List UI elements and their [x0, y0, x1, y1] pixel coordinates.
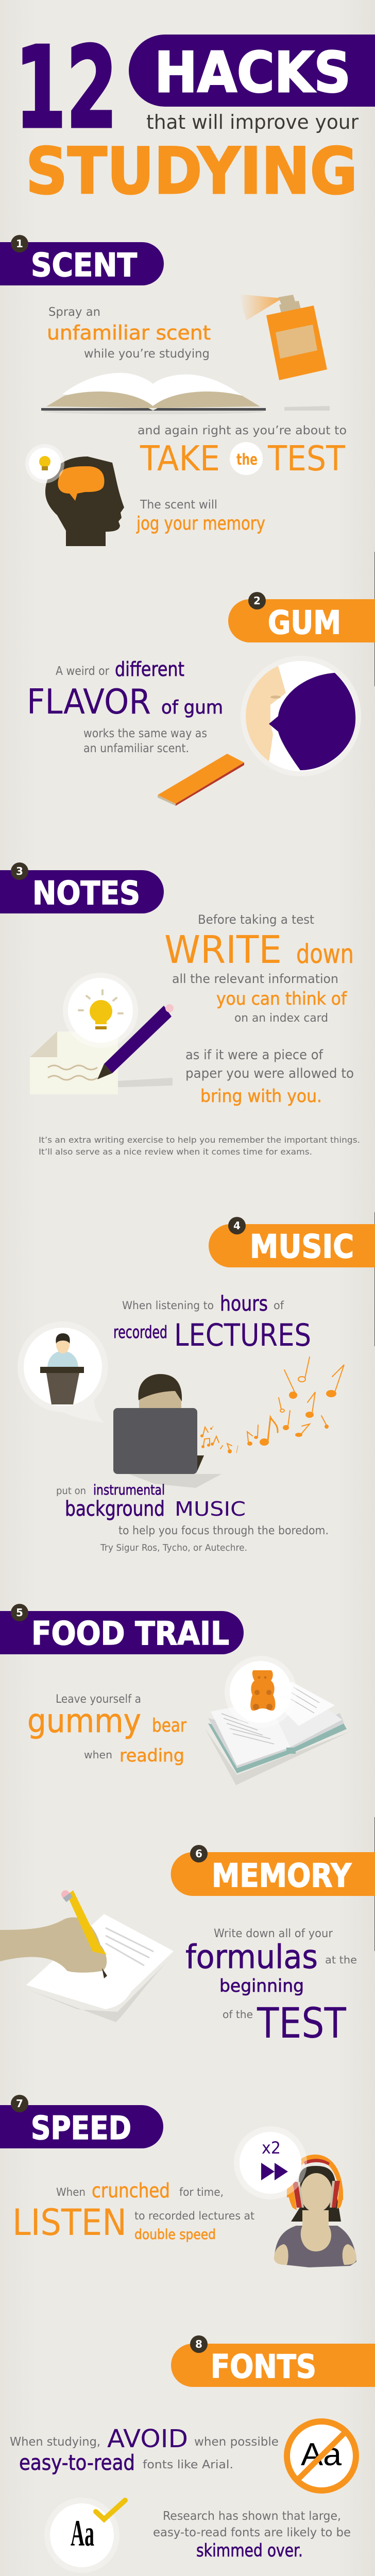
- heading: notes: NOTES: [32, 874, 140, 912]
- panel: fonts: [10, 2335, 375, 2576]
- text: to recorded lectures: to recorded lectures at: [134, 2210, 254, 2222]
- text: music: MUSIC: [175, 1498, 246, 1520]
- heading: fonts: [171, 2335, 375, 2387]
- heading: speed: [0, 2095, 163, 2148]
- text: and again: and again right as you’re about to: [138, 424, 347, 437]
- text: index card: on an index card: [234, 1012, 328, 1025]
- icon: head with brain and bulb: [25, 444, 124, 546]
- icon: approved serif: [44, 2498, 125, 2573]
- icon: face blowing bubble: [246, 661, 361, 771]
- text: easy fonts likely: easy-to-read fonts are likely to be: [153, 2526, 351, 2539]
- text: unfamiliar scent: unfamiliar scent: [47, 321, 211, 344]
- heading: speed: SPEED: [31, 2109, 131, 2147]
- subtitle: that will improve your: [146, 111, 359, 133]
- callout: the: [230, 442, 263, 475]
- text: relevant information: all the relevant information: [172, 972, 338, 986]
- heading: memory: 6: [195, 1848, 202, 1860]
- hacks word: HACKS: [155, 41, 351, 105]
- heading: music: MUSIC: [250, 1228, 354, 1265]
- text: allowed to: paper you were allowed to: [185, 1066, 354, 1081]
- icon: woman with headphones: x2: [262, 2138, 281, 2158]
- icon: open book: [41, 373, 266, 414]
- panel: memory: [0, 1845, 375, 2048]
- icon: index card and pencil: [30, 973, 174, 1094]
- hacks banner: [129, 35, 375, 107]
- text: leave yourself: Leave yourself a: [56, 1693, 141, 1706]
- text: lectures: LECTURES: [174, 1317, 311, 1353]
- text: recorded: recorded: [113, 1322, 167, 1342]
- heading: gum: [228, 592, 375, 642]
- text: extra writing exercise: It’s an extra writing exercise to help you remember the important things.: [39, 1135, 360, 1145]
- icon: woman with headphones: [234, 2126, 356, 2267]
- icon: hand writing on paper: [0, 1890, 174, 2022]
- text: when: when: [84, 1749, 112, 1761]
- heading: notes: [0, 862, 164, 913]
- text: easy-to-read: easy-to-read: [19, 2450, 135, 2475]
- heading: scent: [0, 235, 164, 285]
- text: double speed: double speed: [134, 2227, 216, 2243]
- text: flavor: FLAVOR: [27, 682, 151, 722]
- text: artist suggestions: Try Sigur Ros, Tycho, or Autechre.: [100, 1543, 247, 1553]
- icon: music notes: [200, 1357, 344, 1453]
- panel: gum: [27, 592, 375, 806]
- text: when listening: When listening to: [122, 1299, 214, 1312]
- text: down: down: [296, 939, 354, 970]
- text: put on: put on: [56, 1485, 86, 1497]
- text: of the: of the: [223, 2008, 253, 2021]
- text: hours: hours: [220, 1292, 268, 1316]
- heading: music: 4: [233, 1219, 241, 1232]
- text: when: When: [56, 2186, 86, 2198]
- panel: food trail: [0, 1604, 351, 1785]
- heading: gum: 2: [253, 595, 261, 607]
- icon: lecturer speech bubble: [18, 1321, 108, 1422]
- text: skimmed over: skimmed over.: [196, 2540, 303, 2561]
- heading: speed: 7: [16, 2097, 23, 2110]
- text: reading: reading: [120, 1745, 184, 1766]
- panel: music: [18, 1217, 375, 1553]
- heading: gum: GUM: [268, 604, 341, 641]
- text: different: different: [115, 658, 184, 681]
- heading: fonts: FONTS: [211, 2348, 316, 2385]
- text: jog your memory: jog your memory: [136, 513, 265, 534]
- text: of gum: of gum: [161, 697, 223, 718]
- icon: stick of gum: [158, 754, 244, 806]
- text: unfamiliar scent: an unfamiliar scent.: [83, 742, 189, 755]
- text: test: TEST: [257, 1999, 346, 2048]
- heading: food trail: [0, 1604, 244, 1654]
- text: avoid: AVOID: [107, 2425, 188, 2453]
- text: bring with you: bring with you.: [200, 1086, 322, 1107]
- text: extra writing exercise: [39, 1135, 360, 1157]
- text: write: WRITE: [164, 928, 282, 972]
- heading: music: [209, 1217, 375, 1267]
- text: test: TEST: [267, 438, 346, 479]
- text: take: TAKE: [140, 438, 220, 479]
- text: for time: for time,: [179, 2186, 224, 2198]
- icon: no arial: [287, 2421, 356, 2490]
- icon: student with laptop: [113, 1374, 221, 1488]
- text: at the: at the: [325, 1954, 357, 1966]
- icon: open book and gummy bear: [205, 1656, 351, 1785]
- text: while studying: while you’re studying: [84, 347, 210, 361]
- heading: memory: MEMORY: [212, 1857, 352, 1894]
- heading: food trail: FOOD TRAIL: [31, 1615, 229, 1652]
- text: of: of: [274, 1299, 284, 1312]
- icon: no arial: Aa: [301, 2437, 342, 2472]
- heading: scent: 1: [16, 238, 23, 250]
- heading: memory: [171, 1845, 375, 1896]
- heading: notes: 3: [16, 865, 23, 877]
- title: [15, 23, 375, 209]
- text: spray: Spray an: [48, 306, 100, 319]
- icon: approved serif: Aa: [71, 2513, 94, 2554]
- text: think of: you can think of: [216, 989, 347, 1009]
- heading: scent: SCENT: [31, 246, 137, 284]
- text: when possible: when possible: [194, 2435, 279, 2449]
- panel: notes: [0, 862, 360, 1157]
- text: background: background: [65, 1497, 165, 1521]
- text: works the same: works the same way as: [83, 727, 207, 740]
- text: crunched: crunched: [92, 2179, 170, 2202]
- callout: the: the: [236, 451, 258, 469]
- text: formulas: formulas: [185, 1938, 318, 1976]
- text: instrumental: instrumental: [93, 1482, 165, 1498]
- text: listen: LISTEN: [12, 2201, 127, 2244]
- text: research: Research has shown that large,: [163, 2510, 341, 2523]
- text: before taking: Before taking a test: [198, 912, 314, 927]
- heading: fonts: 8: [195, 2338, 202, 2350]
- panel: scent: [0, 235, 347, 546]
- text: weird or: A weird or: [56, 665, 109, 678]
- text: write down: Write down all of your: [214, 1927, 333, 1940]
- text: beginning: beginning: [219, 1976, 304, 1996]
- text: fonts like arial: fonts like Arial.: [143, 2459, 233, 2471]
- icon: spray bottle: [239, 294, 330, 411]
- number 12: 12: [15, 23, 117, 154]
- text: scent will: The scent will: [140, 498, 217, 512]
- text: piece of: as if it were a piece of: [185, 1047, 323, 1063]
- text: extra writing exercise: It’ll also serve as a nice review when it comes time for exams.: [39, 1147, 312, 1157]
- panel: speed: [0, 2095, 356, 2267]
- heading: food trail: 5: [16, 1606, 23, 1619]
- text: gummy: gummy: [27, 1702, 141, 1740]
- text: focus through boredom: to help you focus through the boredom.: [118, 1524, 329, 1537]
- text: bear: bear: [152, 1715, 186, 1736]
- text: when studying: When studying,: [10, 2435, 100, 2449]
